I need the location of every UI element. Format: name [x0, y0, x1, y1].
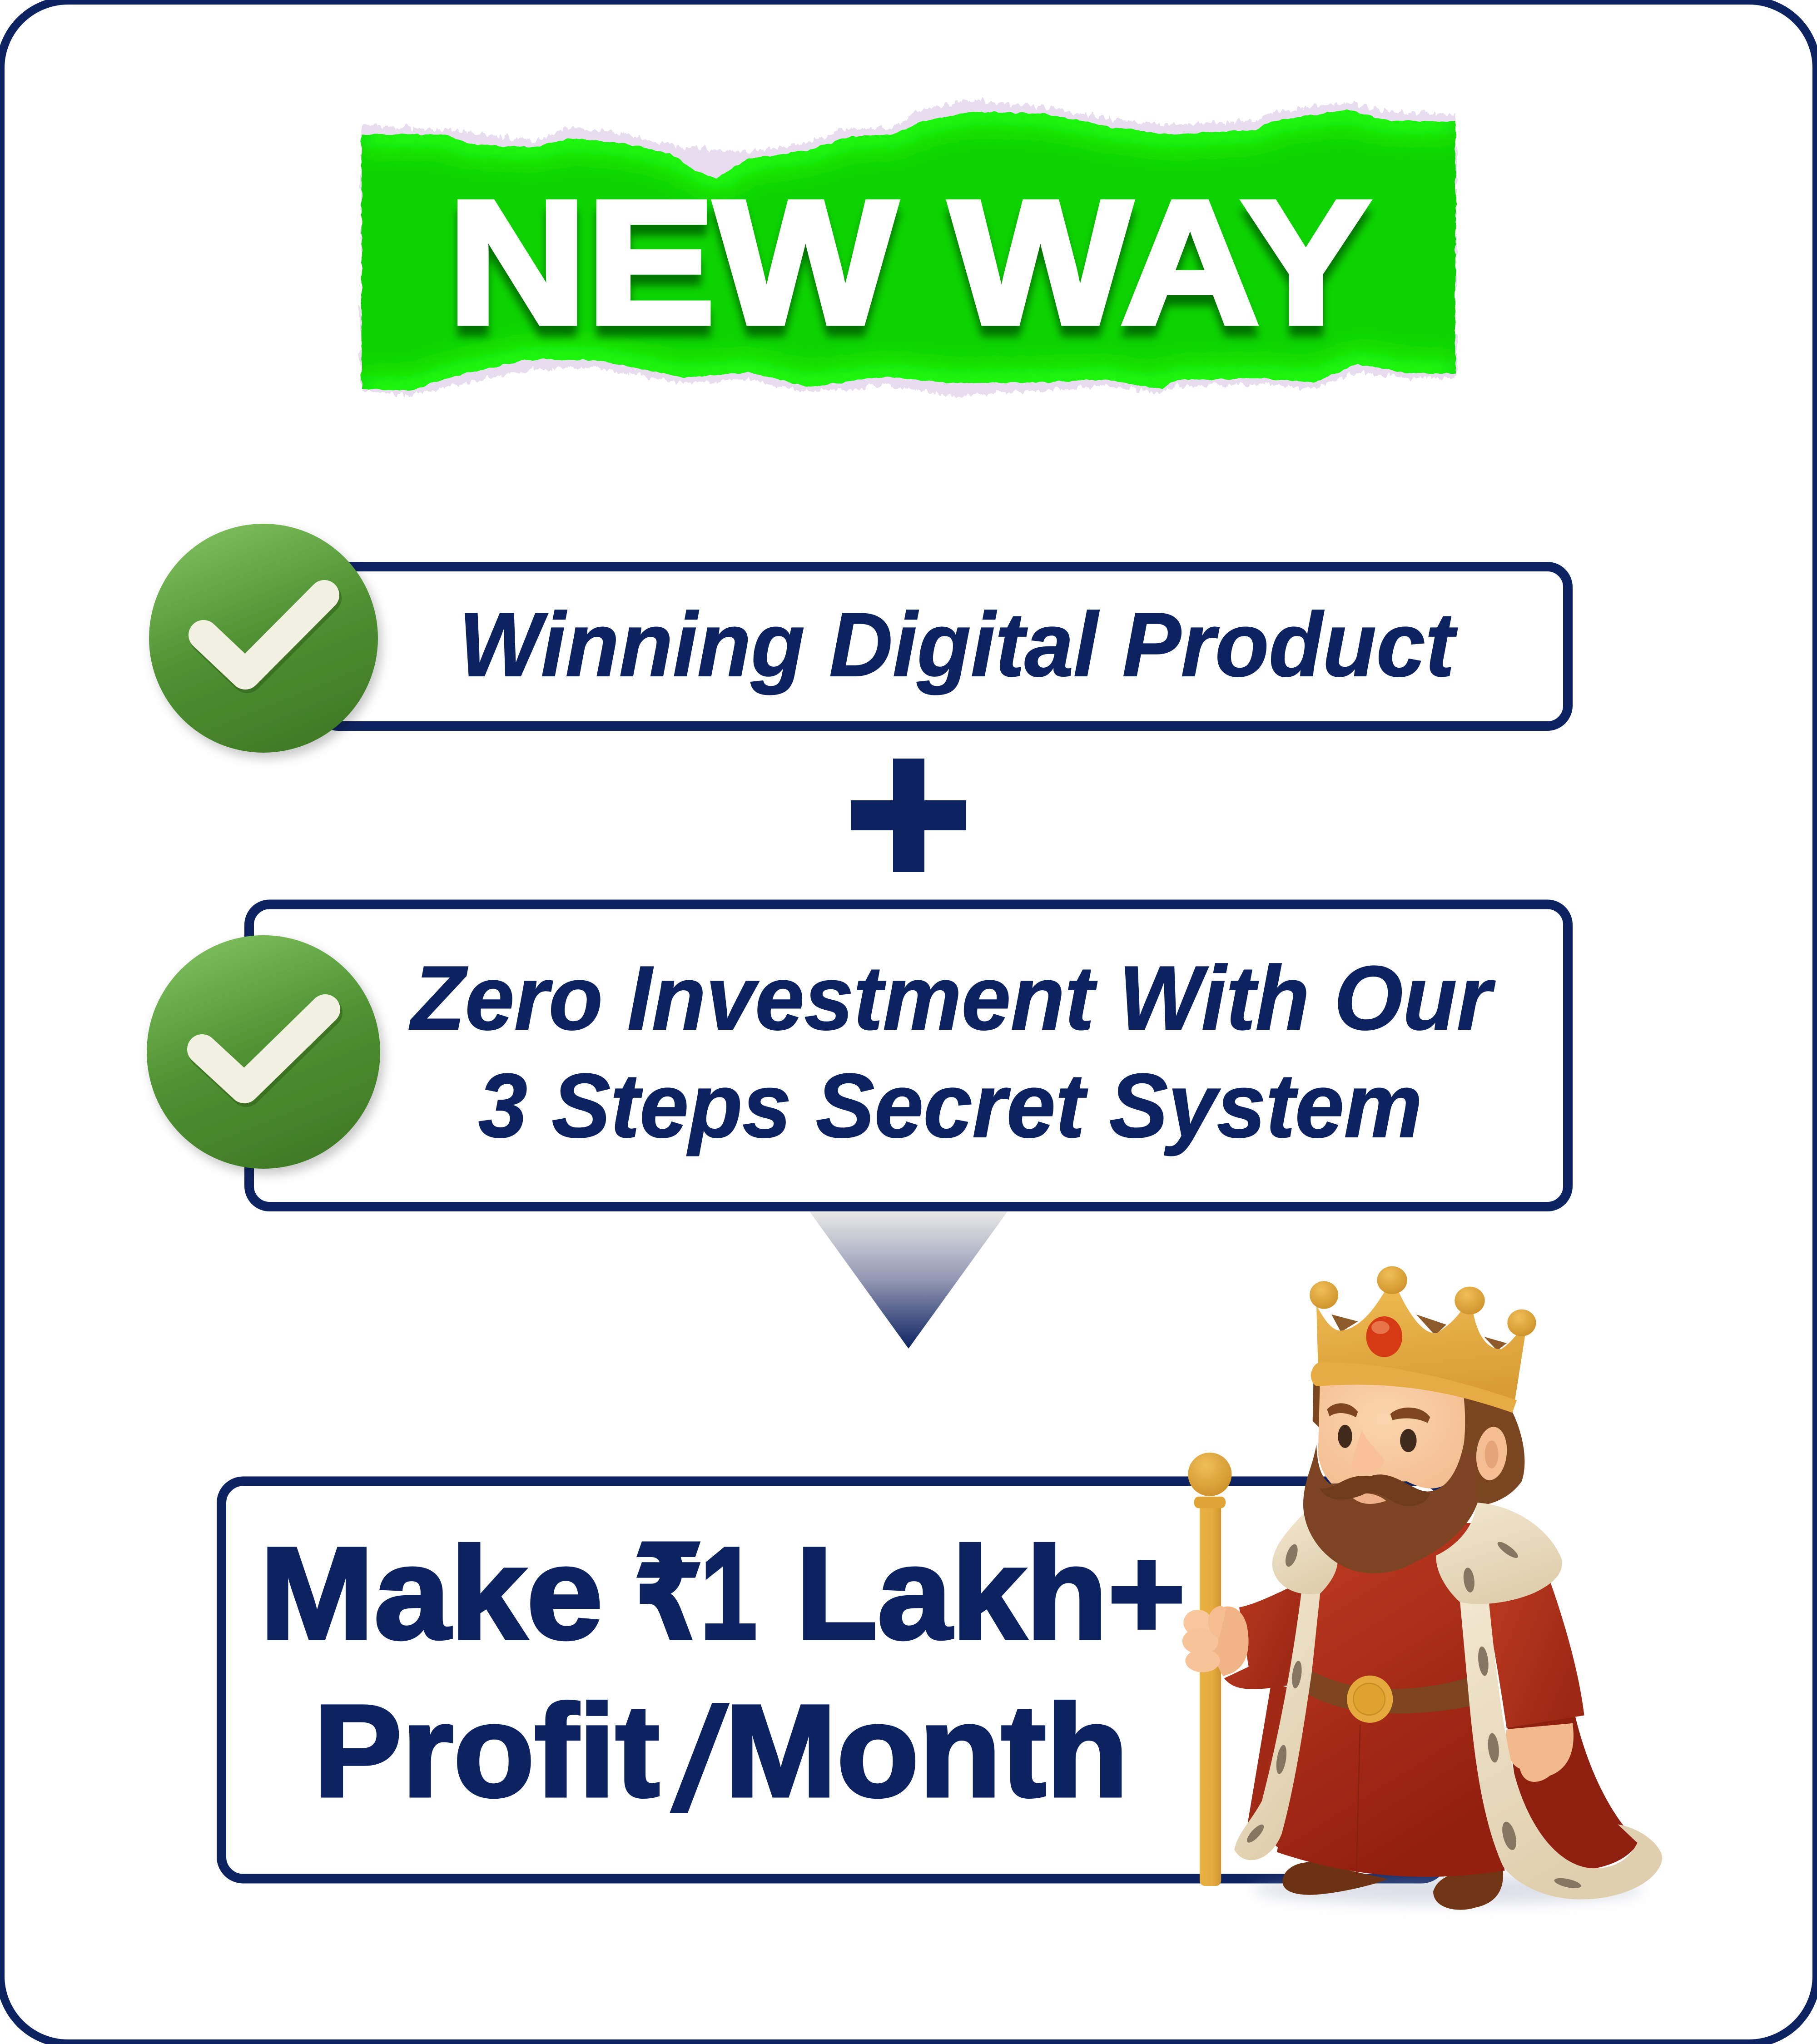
- crown band: [1311, 1362, 1517, 1413]
- right cape: [1507, 1713, 1638, 1870]
- result text line 1: 1: [700, 1520, 757, 1667]
- boots: [1282, 1862, 1503, 1910]
- right hand: [1505, 1723, 1574, 1782]
- result text line 2: Month: [725, 1678, 1128, 1824]
- ground shadow: [1252, 1875, 1644, 1904]
- result text line 1: ₹: [633, 1520, 704, 1667]
- label text: Winning Digital Product: [459, 594, 1458, 695]
- label text line 1: Zero Investment With Our: [409, 948, 1495, 1049]
- box outline: [318, 567, 1568, 726]
- right sleeve: [1486, 1581, 1584, 1728]
- label text line 2: 3 Steps Secret System: [478, 1055, 1422, 1156]
- belt: [1309, 1671, 1471, 1713]
- staff: [1188, 1453, 1231, 1886]
- ermine spots: [1245, 1539, 1582, 1890]
- result text line 2: /: [663, 1677, 736, 1841]
- left ermine band: [1234, 1593, 1320, 1860]
- beard: [1303, 1435, 1479, 1573]
- mustache: [1320, 1474, 1430, 1506]
- belt buckle: [1347, 1676, 1393, 1723]
- icon: green check 2: [147, 935, 380, 1169]
- face: [1318, 1372, 1465, 1488]
- crown orbs: [1310, 1266, 1536, 1336]
- icon: plus sign: [851, 759, 966, 872]
- robe: [1277, 1523, 1505, 1877]
- result text line 1: Lakh+: [796, 1520, 1186, 1667]
- result text line 1: Make: [260, 1520, 603, 1667]
- box outline: [222, 1481, 1444, 1879]
- box outline: [249, 904, 1568, 1206]
- result text line 2: [313, 1677, 1128, 1841]
- result text line 1: [260, 1520, 1186, 1667]
- green strip: [359, 104, 1458, 400]
- crown gem: [1366, 1316, 1402, 1357]
- crown: [1310, 1266, 1536, 1413]
- banner: torn green paper with NEW WAY: [359, 101, 1458, 400]
- left sleeve: [1224, 1581, 1303, 1689]
- heading: NEW WAY: NEW WAY: [448, 164, 1370, 360]
- panel: result: [222, 1481, 1444, 1879]
- icon: green check 1: [149, 524, 378, 753]
- nose: [1352, 1430, 1384, 1473]
- eyebrows: [1327, 1403, 1430, 1423]
- fur collar: [1272, 1503, 1562, 1604]
- crown inner: [1331, 1315, 1507, 1350]
- left hand gripping staff: [1182, 1606, 1249, 1676]
- ear: [1473, 1424, 1510, 1483]
- panel: zero investment system: [147, 904, 1568, 1206]
- arrow: gradient down triangle: [809, 1211, 1008, 1349]
- right ermine band: [1460, 1597, 1662, 1900]
- result text line 2: Profit: [313, 1678, 660, 1824]
- panel: winning digital product: [149, 524, 1568, 753]
- left cape: [1248, 1683, 1298, 1850]
- hair back: [1313, 1379, 1524, 1506]
- mouth: [1352, 1493, 1386, 1504]
- eyes: [1338, 1425, 1417, 1452]
- crown body: [1316, 1289, 1525, 1405]
- torn paper fringe: [362, 101, 1455, 396]
- robe center fold: [1356, 1725, 1360, 1876]
- illustration: king with crown and staff: [1182, 1266, 1662, 1910]
